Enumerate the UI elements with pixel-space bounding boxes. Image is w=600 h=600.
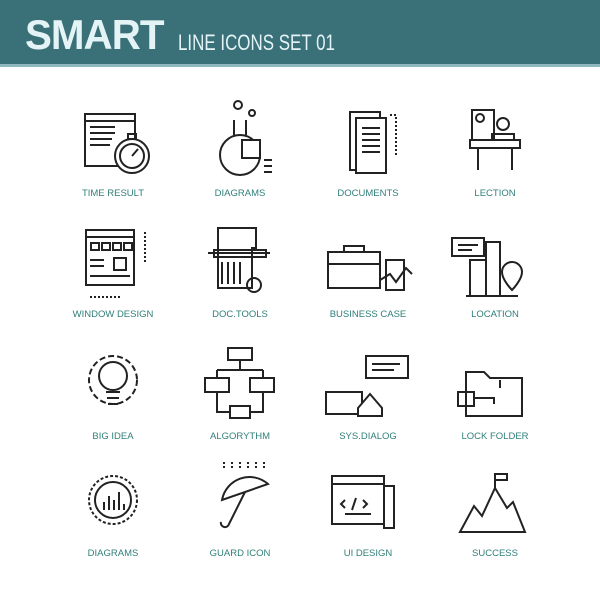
label: business case: BUSINESS CASE [330, 309, 406, 320]
label: big idea: BIG IDEA [92, 431, 134, 442]
icon: algorythm [205, 348, 274, 418]
subtitle: LINE ICONS SET 01 [178, 30, 335, 55]
icon: success [460, 474, 525, 532]
icon: diagrams circle [89, 476, 137, 524]
icon: window design [86, 230, 145, 297]
label: sys dialog: SYS.DIALOG [339, 431, 397, 442]
icon: guard umbrella [221, 462, 268, 527]
icon: doc tools [208, 228, 270, 292]
label: guard icon: GUARD ICON [210, 548, 270, 559]
icon: location [452, 238, 522, 296]
icon: lock folder [458, 372, 522, 416]
title: SMART [25, 11, 164, 58]
label: success: SUCCESS [472, 548, 518, 559]
icon: documents [350, 112, 396, 173]
label: window design: WINDOW DESIGN [73, 309, 154, 320]
label: time result: TIME RESULT [82, 188, 144, 199]
label: algorythm: ALGORYTHM [210, 431, 270, 442]
icon: time result [85, 114, 149, 173]
icon: diagrams flask [220, 101, 272, 175]
icon: lection [470, 110, 520, 170]
label: location: LOCATION [471, 309, 519, 320]
label: ui design: UI DESIGN [344, 548, 392, 559]
label: lock folder: LOCK FOLDER [461, 431, 529, 442]
icon: big idea [89, 356, 137, 404]
label: lection: LECTION [474, 188, 516, 199]
label: diagrams: DIAGRAMS [215, 188, 265, 199]
label: diagrams 2: DIAGRAMS [88, 548, 138, 559]
label: documents: DOCUMENTS [337, 188, 399, 199]
header banner [0, 0, 600, 67]
icon: sys dialog [326, 356, 408, 416]
label: doc tools: DOC.TOOLS [212, 309, 268, 320]
icon: business case [328, 246, 412, 290]
icon: ui design [332, 476, 394, 528]
